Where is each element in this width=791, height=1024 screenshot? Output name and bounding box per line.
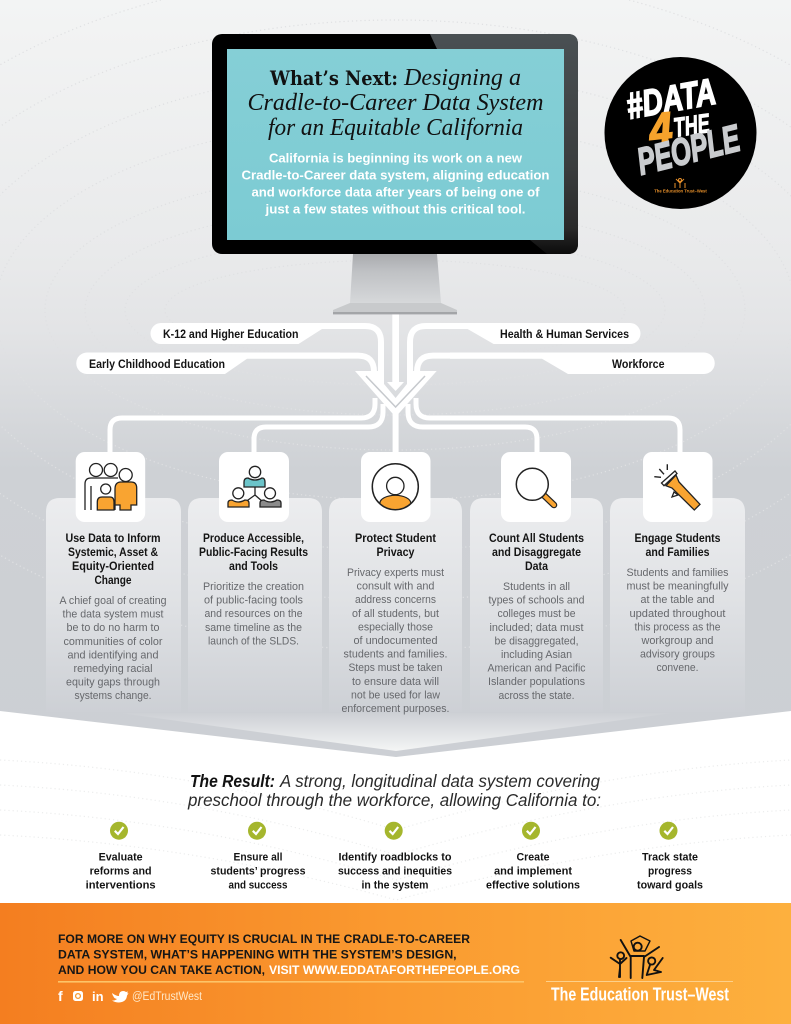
label: Early Childhood Education: Early Childhood Education (89, 359, 225, 371)
social icons and handle: in (92, 989, 104, 1004)
result item: evaluate (86, 822, 156, 892)
screen title: Cradle-to-Career Data System (248, 90, 544, 116)
heading: protect privacy: Protect Student (355, 533, 436, 545)
text: engage students: updated throughout (630, 608, 726, 620)
badge: #Data4ThePeople: THE (672, 108, 712, 143)
text: use data: remedying racial (74, 663, 152, 675)
icon: network of people (228, 466, 281, 507)
logo: The Education Trust-West: The Education Trust–West (551, 984, 729, 1004)
text: use data: equity gaps through (66, 677, 160, 689)
icon: flashlight (654, 464, 700, 510)
text: use data: A chief goal of creating (60, 595, 166, 607)
icon: check (660, 822, 678, 840)
result item: evaluate: interventions (86, 880, 156, 892)
result item: track: toward goals (637, 880, 703, 892)
text: use data: communities of color (64, 636, 163, 648)
result item: ensure: and success (228, 880, 288, 892)
result item: create: effective solutions (486, 880, 580, 892)
result item: evaluate: Evaluate (99, 852, 143, 864)
result item: identify: in the system (362, 880, 429, 892)
result item: ensure: Ensure all (234, 852, 282, 864)
label: Health & Human Services: Health & Human Services (500, 329, 629, 341)
result item: create (486, 822, 580, 892)
result item: evaluate: reforms and (90, 866, 152, 878)
screen intro text (242, 150, 550, 216)
label: Workforce: Workforce (612, 359, 664, 371)
heading: use data: Equity-Oriented (72, 561, 154, 573)
footer call to action (58, 933, 520, 977)
icon: magnifying glass (516, 468, 554, 505)
panel: produce accessible (188, 452, 322, 712)
icon: family (85, 464, 137, 510)
result item: track: progress (648, 866, 692, 878)
text: engage students: at the table and (640, 594, 714, 606)
text: use data (60, 595, 166, 702)
result item: track (637, 822, 703, 892)
panel: engage students (610, 452, 745, 712)
social icons and handle: f (58, 988, 63, 1004)
icon: student profile (372, 464, 418, 511)
heading: engage students: and Families (646, 547, 710, 559)
text: protect privacy: of undocumented (354, 635, 438, 647)
result statement (187, 771, 601, 810)
heading: use data (66, 533, 160, 587)
result item: identify: success and inequities (338, 866, 452, 878)
heading: produce accessible: and Tools (229, 561, 278, 573)
text: engage students (626, 567, 729, 674)
heading: use data: Change (94, 575, 132, 587)
result item: ensure: students’ progress (210, 866, 306, 878)
heading: produce accessible: Public-Facing Results (199, 547, 308, 559)
text: count all students (488, 581, 586, 702)
badge: #Data4ThePeople: #DATA (623, 71, 719, 127)
text: count all students: American and Pacific (488, 663, 586, 675)
heading: protect privacy: Privacy (376, 547, 415, 559)
text: protect privacy: of all students, but (352, 608, 439, 620)
text: protect privacy: consult with and (356, 581, 434, 593)
panel: protect privacy (329, 452, 462, 715)
text: produce accessible: of public-facing tools (204, 595, 304, 607)
text: engage students: advisory groups (640, 649, 716, 661)
text: protect privacy: Steps must be taken (348, 662, 442, 674)
footer call to action: VISIT WWW.EDDATAFORTHEPEOPLE.ORG (269, 964, 520, 977)
badge: #Data4ThePeople (604, 57, 756, 209)
text: protect privacy: especially those (358, 621, 433, 633)
footer call to action: DATA SYSTEM, WHAT’S HAPPENING WITH THE SYSTEM’S DESIGN, (58, 948, 457, 962)
connector pipes and arrow (76, 314, 715, 453)
badge: #Data4ThePeople: 4 (646, 102, 675, 156)
text: count all students: Students in all (503, 581, 570, 593)
icon: check (385, 822, 403, 840)
badge: #Data4ThePeople: The Education Trust–West (654, 188, 707, 194)
white result section with chevron edge (0, 711, 791, 903)
footer call to action: FOR MORE ON WHY EQUITY IS CRUCIAL IN THE CRADLE-TO-CAREER (58, 933, 471, 946)
label: K-12 and Higher Education: K-12 and Higher Education (163, 329, 298, 341)
icon: check (110, 822, 128, 840)
result item: identify (338, 822, 452, 892)
heading: engage students: Engage Students (634, 533, 720, 545)
text: protect privacy: address concerns (355, 594, 437, 606)
screen intro text: and workforce data after years of being one of (252, 184, 540, 200)
heading: count all students (489, 533, 584, 573)
screen title (248, 65, 544, 141)
screen title: Designing a (403, 65, 521, 91)
text: produce accessible (203, 581, 304, 647)
text: engage students: convene. (656, 662, 698, 674)
heading: use data: Use Data to Inform (66, 533, 160, 545)
icon: check (522, 822, 540, 840)
result item: identify: Identify roadblocks to (338, 852, 452, 864)
monitor (212, 34, 578, 314)
social icons and handle: @EdTrustWest (132, 991, 203, 1003)
text: produce accessible: launch of the SLDS. (208, 635, 299, 647)
text: engage students: workgroup and (640, 635, 714, 647)
panel: count all students (470, 452, 603, 712)
text: count all students: including Asian (501, 649, 572, 661)
text: count all students: included; data must (490, 622, 584, 634)
heading: use data: Systemic, Asset & (68, 547, 158, 559)
text: protect privacy: enforcement purposes. (342, 703, 450, 715)
text: count all students: be disaggregated, (494, 635, 578, 647)
icon: check (248, 822, 266, 840)
text: use data: and identifying and (68, 649, 158, 661)
text: use data: systems change. (74, 690, 152, 702)
result item: create: and implement (494, 866, 572, 878)
screen intro text: Cradle-to-Career data system, aligning education (242, 168, 550, 182)
screen title: for an Equitable California (268, 115, 523, 141)
text: use data: be to do no harm to (66, 622, 160, 634)
heading: count all students: and Disaggregate (492, 547, 581, 559)
heading: produce accessible: Produce Accessible, (203, 533, 304, 545)
result item: track: Track state (642, 852, 698, 864)
result item: ensure (210, 822, 306, 892)
text: produce accessible: Prioritize the creation (203, 581, 304, 593)
screen intro text: California is beginning its work on a new (269, 150, 522, 166)
badge: #Data4ThePeople: PEOPLE (633, 118, 745, 184)
result statement: preschool through the workforce, allowing California to: (187, 790, 601, 810)
text: count all students: types of schools and (488, 595, 584, 607)
text: protect privacy: to ensure data will (352, 676, 439, 688)
result statement: The Result: (190, 771, 275, 791)
heading: count all students: Data (525, 561, 549, 573)
footer call to action: AND HOW YOU CAN TAKE ACTION, (58, 964, 265, 977)
screen intro text: just a few states without this critical tool. (264, 202, 526, 216)
text: count all students: Islander populations (488, 676, 586, 688)
text: use data: the data system must (62, 609, 164, 621)
result item: create: Create (516, 852, 550, 864)
text: produce accessible: same timeline as the (205, 622, 302, 634)
screen title: What’s Next: (269, 66, 398, 90)
heading: engage students (634, 533, 720, 559)
text: count all students: across the state. (498, 690, 574, 702)
text: protect privacy: students and families. (344, 649, 448, 661)
text: protect privacy: not be used for law (351, 689, 440, 701)
social icons and handle (58, 988, 203, 1004)
panel: use data (46, 452, 181, 712)
text: engage students: this process as the (634, 621, 720, 633)
text: produce accessible: and resources on the (204, 608, 302, 620)
text: engage students: Students and families (626, 567, 729, 579)
heading: protect privacy (355, 533, 436, 559)
heading: count all students: Count All Students (489, 533, 584, 545)
text: protect privacy: Privacy experts must (347, 567, 444, 579)
footer (0, 903, 791, 1024)
result statement: A strong, longitudinal data system covering (279, 771, 600, 791)
text: engage students: must be meaningfully (626, 581, 729, 593)
logo: The Education Trust-West (546, 936, 733, 1004)
heading: produce accessible (199, 533, 308, 573)
text: protect privacy (342, 567, 450, 715)
text: count all students: colleges must be (498, 608, 576, 620)
